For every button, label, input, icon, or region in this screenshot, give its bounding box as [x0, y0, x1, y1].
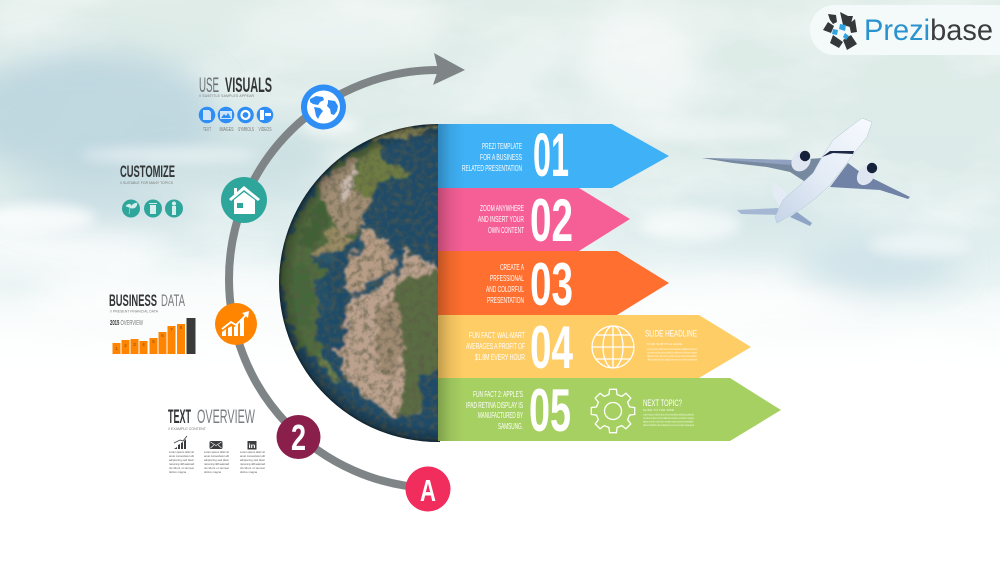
section: use visuals: IMAGES: [220, 127, 234, 133]
text columns: [169, 450, 266, 474]
marker: A: [406, 466, 450, 512]
text columns: adipiscing sed diam: [204, 458, 230, 462]
bar chart: 4: [142, 342, 145, 347]
text columns: dolore magna: [240, 470, 258, 474]
text columns: amet consectetur elit: [169, 454, 194, 458]
text columns: Lorem ipsum dolor sit: [240, 450, 265, 454]
heading: use visuals: VISUALS: [225, 74, 272, 97]
heading: text overview: OVERVIEW: [197, 407, 255, 428]
ribbon 04 side text: YOUR SUBTITLE HERE: [646, 342, 682, 346]
icons: teal row: [122, 200, 183, 218]
icons: blue row: [199, 107, 273, 123]
ribbon 05 text: FUN FACT 2: APPLE'S: [473, 389, 523, 399]
section: use visuals: TEXT: [203, 127, 211, 133]
ribbon 05 text: IPAD RETINA DISPLAY IS: [466, 400, 523, 410]
ribbon 05 side text: ullamco laboris nisi ut aliquip ex ea commodo consequat: [643, 423, 694, 427]
bar chart: 1: [115, 346, 118, 351]
globe: [279, 124, 440, 442]
icon: blue globe circle: [301, 84, 346, 130]
section: text overview: [168, 407, 266, 474]
ribbon 04 side text: [645, 328, 698, 362]
section: text overview: // EXAMPLE CONTENT: [168, 427, 207, 431]
panel: ribbon 01: [438, 121, 669, 189]
curved arrow: [229, 53, 465, 488]
ribbon 03 text: PRESENTATION: [487, 295, 524, 305]
icon: chart circle: [215, 303, 257, 345]
icon: house circle: [221, 177, 267, 223]
ribbon 05 side text: do eiusmod tempor incididunt ut labore et dolore magna: [643, 416, 695, 420]
heading: customize: CUSTOMIZE: [120, 163, 175, 181]
logo wordmark: Prezibase: [864, 14, 993, 47]
text columns: Lorem ipsum dolor sit: [204, 450, 229, 454]
panel: ribbon 03: [438, 251, 669, 318]
bar chart: [112, 318, 196, 354]
ribbon 02 text: AND INSERT YOUR: [478, 214, 524, 224]
heading: business data: BUSINESS: [109, 292, 157, 310]
section: use visuals: [199, 74, 273, 133]
text columns: adipiscing sed diam: [169, 458, 195, 462]
text columns: Lorem ipsum dolor sit: [169, 450, 194, 454]
ribbon 05 side text: SLIDE TO THE SIDE: [643, 408, 674, 412]
text columns: dolore magna: [204, 470, 222, 474]
panel: ribbon 04: [438, 314, 751, 381]
section: use visuals: SYMBOLS: [238, 127, 254, 133]
ribbon 03 text: CREATE A: [500, 262, 524, 272]
section: use visuals: VIDEOS: [258, 127, 272, 133]
ribbon 05 text: 05: [529, 377, 571, 444]
ribbon 04 side text: SLIDE HEADLINE: [645, 328, 697, 340]
ribbon 05 text: SAMSUNG.: [498, 421, 523, 431]
ribbon 02 text: ZOOM ANYWHERE: [480, 203, 524, 213]
ribbon 03 text: PRFESSIONAL: [490, 273, 524, 283]
ribbon 04 text: FUN FACT: WAL-MART: [469, 330, 525, 340]
panel: ribbon 05: [438, 377, 781, 444]
text columns: tincidunt ut laoreet: [169, 466, 194, 470]
ribbon 03 text: [486, 251, 573, 318]
ribbon 04 text: AVERAGES A PROFIT OF: [466, 341, 525, 351]
ribbon 05 side text: aliqua ut enim ad minim veniam quis nostrud exercitation: [643, 420, 695, 424]
ribbon 05 side text: [643, 398, 695, 427]
ribbon 04 side text: do eiusmod tempor incididunt ut labore et dolore magna: [647, 350, 698, 354]
heading: text overview: [168, 407, 255, 428]
ribbon 02 text: [478, 187, 573, 254]
logo badge: Prezibase: [810, 5, 1000, 55]
bar chart: 5: [152, 339, 155, 344]
section: use visuals: // SUBTITLE SAMPLES APPEAR: [199, 94, 255, 98]
icon: gear: [591, 389, 635, 433]
text columns: adipiscing sed diam: [240, 458, 266, 462]
section: business data: [109, 292, 196, 354]
text columns: tincidunt ut laoreet: [204, 466, 229, 470]
ribbon 04 text: 04: [530, 314, 573, 381]
panel: ribbon 02: [438, 187, 630, 254]
ribbon 01 text: [462, 121, 569, 189]
ribbon 04 side text: aliqua ut enim ad minim veniam quis nostrud exercitation: [647, 354, 698, 358]
ribbon 04 text: [466, 314, 573, 381]
ribbon 01 text: PREZI TEMPLATE: [482, 141, 522, 151]
bar chart: 6: [161, 333, 164, 338]
ribbon 01 text: RELATED PRESENTATION: [462, 163, 522, 173]
icon: airplane: [702, 118, 910, 226]
ribbon 04 text: $1.8M EVERY HOUR: [475, 352, 525, 362]
heading: use visuals: USE: [199, 74, 219, 97]
ribbon 03 text: 03: [530, 251, 573, 318]
ribbon 02 text: OWN CONTENT: [488, 225, 524, 235]
heading: use visuals: [199, 74, 272, 97]
ribbon 05 side text: Lorem ipsum dolor sit amet consectetur adipiscing elit sed: [643, 412, 695, 416]
marker: 2: [276, 415, 320, 459]
section: customize: // SUITABLE FOR MANY TOPICS: [120, 181, 174, 185]
section: business data: // PRESENT FINANCIAL DATA: [110, 310, 159, 314]
text columns: nonummy nibh euismod: [240, 462, 266, 466]
text columns: nonummy nibh euismod: [204, 462, 230, 466]
ribbon 04 side text: ullamco laboris nisi ut aliquip ex ea commodo consequat: [647, 358, 697, 362]
ribbon 01 text: FOR A BUSINESS: [480, 152, 522, 162]
text columns: nonummy nibh euismod: [169, 462, 194, 466]
ribbon 03 text: AND COLORFUL: [486, 284, 524, 294]
bar chart: 3: [133, 342, 136, 347]
ribbon 01 text: 01: [533, 121, 569, 189]
marker: A: A: [420, 473, 436, 508]
bar chart: 7: [170, 327, 173, 332]
ribbon 05 side text: NEXT TOPIC?: [643, 398, 682, 409]
heading: business data: DATA: [161, 292, 185, 310]
section: business data: 2015 OVERVIEW: [110, 320, 143, 327]
text columns: amet consectetur elit: [204, 454, 229, 458]
text columns: dolore magna: [169, 470, 186, 474]
marker: 2: 2: [291, 417, 306, 458]
text columns: amet consectetur elit: [240, 454, 265, 458]
icon: wire globe: [592, 326, 634, 368]
ribbon 02 text: 02: [530, 187, 573, 254]
ribbon 05 text: MANUFACTURED BY: [478, 410, 523, 420]
icon: logo star: [823, 12, 857, 50]
heading: text overview: TEXT: [168, 407, 191, 428]
ribbon 05 text: [466, 377, 571, 444]
text columns: tincidunt ut laoreet: [240, 466, 265, 470]
section: customize: [120, 163, 183, 218]
icons: overview row: in: [248, 443, 256, 450]
bar chart: 2: [124, 343, 127, 348]
bar chart: 8: [180, 325, 183, 330]
ribbon 04 side text: Lorem ipsum dolor sit amet consectetur adipiscing elit sed: [647, 347, 698, 351]
